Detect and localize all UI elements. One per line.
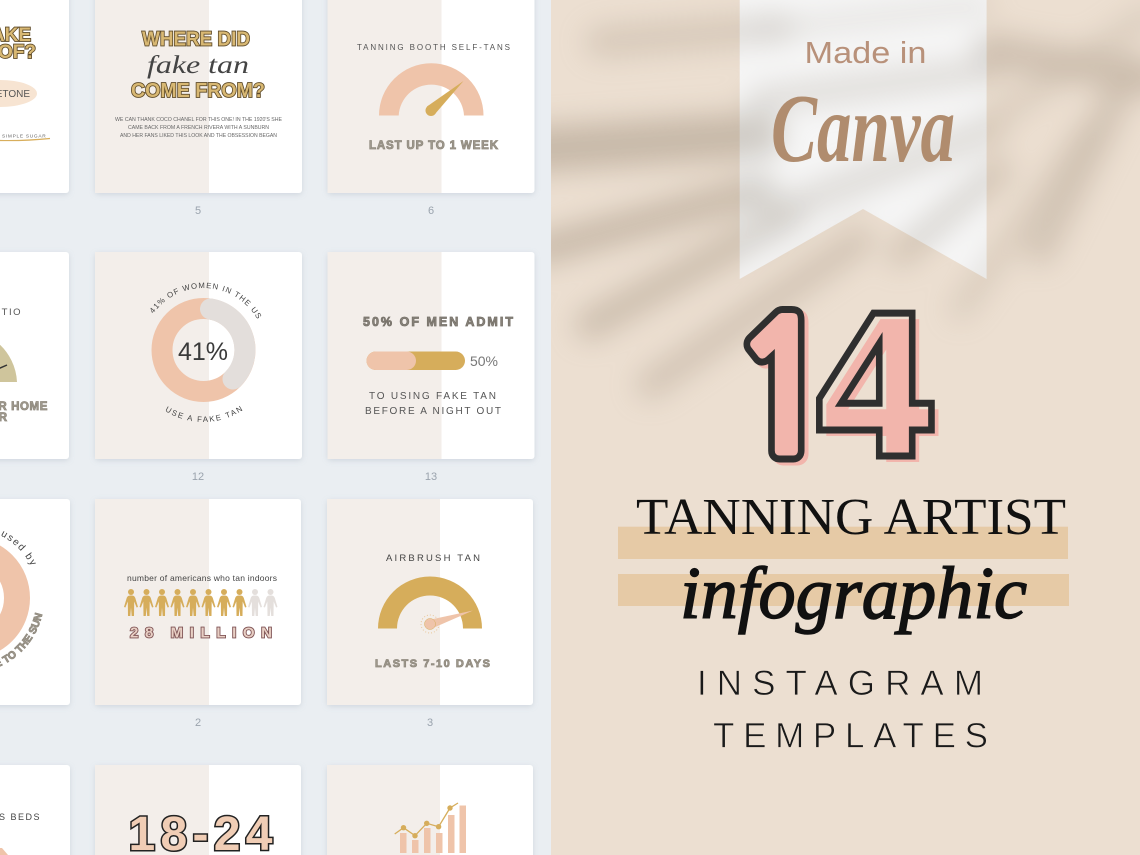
number outline: [730, 275, 940, 503]
gauge: [379, 63, 484, 116]
panel: card row 4 left: [0, 765, 70, 855]
value: 41%: [178, 338, 228, 366]
page number 5: 5: [195, 205, 201, 217]
panel: card 6 tanning booth: [328, 0, 534, 193]
background: template grid: [0, 0, 551, 855]
donut fragment: [0, 550, 17, 646]
bar and line chart: [395, 803, 466, 853]
gauge fragment: [0, 848, 8, 855]
pill: skin tone: [0, 80, 37, 107]
number outline: 1: [730, 300, 834, 480]
panel: card 12 donut: [94, 252, 304, 462]
panel: card chart: [327, 765, 533, 855]
panel: card 2 people chart: [95, 499, 301, 705]
gauge: [378, 577, 482, 633]
caption: TO USING FAKE TAN: [369, 391, 496, 402]
pictogram: 8 of 10 people: [124, 589, 278, 616]
number shadow fill: 1: [734, 304, 838, 482]
caption fragment: [0, 401, 48, 424]
value: 28 MILLION: [130, 624, 272, 642]
heading: come from: COME FROM?: [131, 80, 265, 102]
title: tanning artist: TANNING ARTIST: [636, 489, 1066, 546]
title: infographic script: infographic: [680, 553, 1027, 635]
script: fake tan: fake tan: [147, 52, 249, 79]
heading fragment: [0, 25, 36, 63]
badge text: canva: Canva: [771, 75, 955, 183]
donut chart: [162, 308, 245, 392]
caption: BEFORE A NIGHT OUT: [365, 406, 501, 417]
panel: card 13 progress bar: [328, 252, 534, 459]
page number 2: 2: [195, 717, 201, 729]
bar value: 50%: [470, 353, 498, 369]
number shadow fill: 4: [818, 281, 947, 509]
paragraph: AND HER FANS LIKED THIS LOOK AND THE OBSESSION BEGAN: [120, 133, 277, 139]
label: AIRBRUSH TAN: [386, 553, 480, 564]
paragraph: [115, 117, 283, 139]
caption: simple sugar: [0, 134, 50, 141]
gauge fragment: [0, 343, 17, 382]
page number 6: 6: [428, 205, 434, 217]
heading: where did: WHERE DID: [142, 28, 250, 50]
highlight bars: [618, 527, 1069, 606]
label fragment: TIO: [2, 307, 22, 318]
curved text top: 41% OF WOMEN IN THE US: [150, 282, 262, 318]
label fragment: S BEDS: [0, 812, 41, 822]
caption: LASTS 7-10 DAYS: [375, 658, 490, 670]
panel: card 3 airbrush gauge: [327, 499, 533, 705]
curved text bottom: USE A FAKE TAN: [166, 406, 242, 422]
caption: simple sugar: SIMPLE SUGAR: [2, 134, 46, 140]
panel: card row 1 left: [0, 0, 69, 193]
subtitle: templates: TEMPLATES: [713, 716, 988, 756]
number outline: 1: [730, 300, 834, 480]
caption: [365, 391, 501, 417]
label: TANNING BOOTH SELF-TANS: [357, 43, 510, 52]
panel: card 5 where did fake tan come from: [95, 0, 302, 193]
big number 14: [730, 275, 947, 509]
number outline: 4: [811, 275, 940, 503]
palm leaf shadow overlay: [530, 5, 1140, 385]
panel: card 18-24: [95, 765, 301, 855]
caption: LAST UP TO 1 WEEK: [369, 140, 499, 152]
panel: right cover background: [551, 0, 1140, 855]
page number 13: 13: [425, 471, 437, 483]
paragraph: WE CAN THANK COCO CHANEL FOR THIS ONE! IN THE 1920'S SHE: [115, 117, 283, 123]
label: number of americans who tan indoors: [127, 573, 277, 583]
badge text: made in: Made in: [804, 35, 926, 70]
ribbon badge: [740, 0, 987, 279]
number shadow fill: [734, 281, 947, 509]
progress bar: [366, 352, 465, 370]
page number 12: 12: [192, 471, 204, 483]
heading: 50% OF MEN ADMIT: [363, 315, 513, 329]
page number 3: 3: [427, 717, 433, 729]
panel: card row 3 left: [0, 499, 72, 708]
subtitle: instagram: INSTAGRAM: [697, 664, 983, 703]
paragraph: CAME BACK FROM A FRENCH RIVERA WITH A SUNBURN: [128, 125, 269, 131]
panel: card row 2 left: [0, 252, 69, 459]
